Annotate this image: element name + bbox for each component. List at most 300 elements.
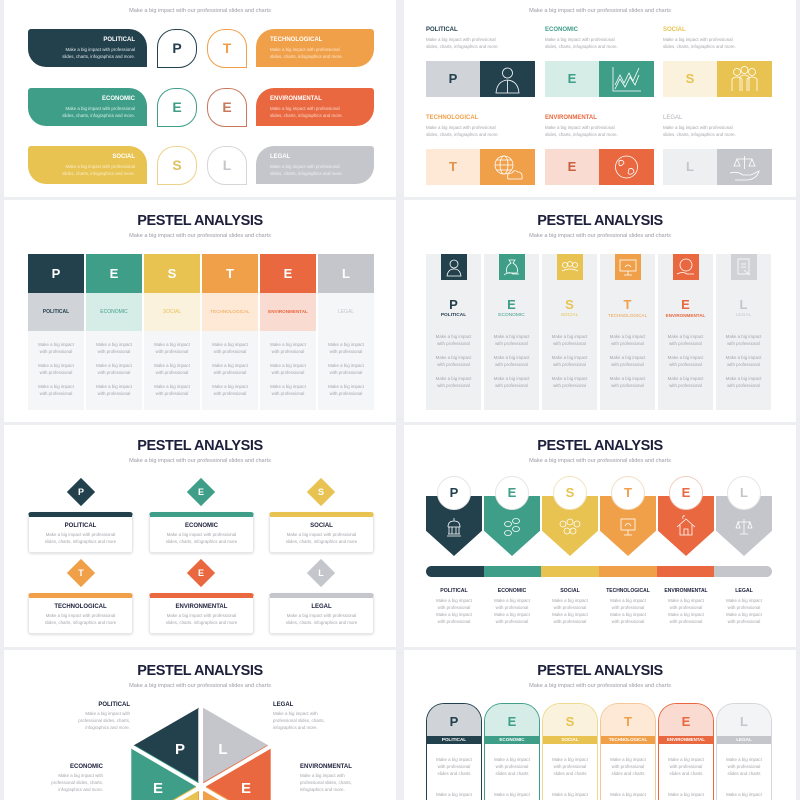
arch: environmental: with professional [670, 764, 702, 769]
bubble: E environmental [207, 88, 247, 127]
arch: environmental: E [682, 714, 690, 729]
card: environmental: Make a big impact with professional [167, 613, 236, 618]
column: legal: L [342, 266, 350, 281]
arch: social: Make a big impact [552, 792, 588, 797]
item: social: SOCIAL [663, 27, 686, 33]
column: political: Make a big impact [436, 376, 471, 381]
label: economic: infographics and more. [58, 787, 103, 792]
labels row: Make a big impact [668, 612, 704, 617]
item: social: Make a big impact with professional [663, 37, 733, 42]
column: social: SOCIAL [163, 309, 181, 315]
card: social: SOCIAL [310, 523, 333, 529]
bubble: E environmental: E [222, 99, 232, 115]
arch: economic: with professional [496, 764, 528, 769]
icon: people [717, 61, 772, 97]
column: environmental: E [681, 297, 690, 312]
column: environmental: ENVIRONMENTAL [268, 309, 308, 314]
card: environmental [149, 593, 254, 634]
column: social: Make a big impact [154, 363, 190, 368]
labels row: POLITICAL [440, 588, 468, 594]
title: PESTEL ANALYSIS [537, 663, 663, 679]
item: economic: slides, charts, infographics and more. [545, 44, 618, 49]
labels row: with professional [612, 605, 644, 610]
label: political: POLITICAL [98, 702, 130, 708]
shield: environmental: E [682, 485, 690, 500]
column: legal: with professional [727, 341, 760, 346]
labels row: Make a big impact [610, 598, 646, 603]
column: technological: with professional [611, 341, 644, 346]
column: social: Make a big impact [154, 342, 190, 347]
arch: economic: Make a big impact [494, 757, 530, 762]
subtitle: Make a big impact with our professional slides and charts [129, 233, 271, 239]
column: political [28, 254, 84, 410]
bubble: P: P [172, 40, 182, 56]
arch: technological: slides and charts [612, 771, 644, 776]
box: political: slides, charts, infographics and more. [62, 54, 135, 59]
box: social: SOCIAL [112, 154, 135, 160]
labels row: ECONOMIC [498, 588, 526, 594]
box: political: POLITICAL [103, 37, 135, 43]
slide 6: shield markers with timeline bar [404, 425, 796, 647]
arch: legal [716, 703, 772, 800]
title: PESTEL ANALYSIS [537, 438, 663, 454]
arch: legal: Make a big impact [726, 792, 762, 797]
arch: environmental: Make a big impact [668, 792, 704, 797]
column: economic [484, 254, 539, 410]
card: economic: ECONOMIC [185, 523, 218, 529]
box: political [28, 29, 147, 67]
bubble: S [157, 146, 197, 185]
item: legal: L [686, 159, 694, 174]
arch: political: P [450, 714, 458, 729]
diamond: T: T [78, 568, 84, 578]
subtitle: Make a big impact with our professional slides and charts [529, 233, 671, 239]
shield: technological [600, 476, 656, 556]
diamond: S: S [318, 487, 324, 497]
label: environmental: ENVIRONMENTAL [300, 764, 352, 770]
column: economic: with professional [98, 370, 130, 375]
column: political: with professional [437, 362, 470, 367]
labels row: Make a big impact [726, 612, 762, 617]
subtitle: Make a big impact with our professional slides and charts [129, 8, 271, 14]
column: legal: Make a big impact [328, 342, 364, 347]
card: social [269, 512, 374, 553]
box: economic [28, 88, 147, 126]
column: legal: LEGAL [736, 313, 751, 318]
labels row: TECHNOLOGICAL [606, 588, 650, 594]
shield: environmental [658, 476, 714, 556]
column: social: SOCIAL [561, 313, 578, 318]
column: economic: ECONOMIC [498, 313, 525, 318]
arch: economic: slides and charts [496, 771, 528, 776]
arch: legal: slides and charts [728, 771, 760, 776]
box: social: slides, charts, infographics and more. [62, 171, 135, 176]
column: environmental: Make a big impact [270, 342, 306, 347]
item: economic: ECONOMIC [545, 27, 578, 33]
subtitle: Make a big impact with our professional slides and charts [129, 683, 271, 689]
box: legal: slides, charts, infographics and more. [270, 171, 343, 176]
box: legal [256, 146, 374, 184]
labels row: Make a big impact [726, 598, 762, 603]
diamond: E2: E [198, 568, 204, 578]
labels row: with professional [496, 605, 528, 610]
column: technological [202, 254, 258, 410]
box: legal: LEGAL [270, 154, 290, 160]
arch: social [542, 703, 598, 800]
column: economic: Make a big impact [494, 355, 529, 360]
column: political: with professional [40, 349, 72, 354]
column: political: with professional [40, 391, 72, 396]
slide 1: speech bubble layout [4, 0, 396, 197]
icon: scales hand [717, 149, 772, 185]
column: economic: with professional [495, 383, 528, 388]
labels row: Make a big impact [436, 612, 472, 617]
icon: earth [599, 149, 654, 185]
item: environmental [545, 114, 654, 185]
card: economic: Make a big impact with professional [167, 532, 236, 537]
card: technological: TECHNOLOGICAL [54, 604, 107, 610]
item: political: P [449, 71, 457, 86]
column: social: Make a big impact [552, 334, 587, 339]
column: political: Make a big impact [436, 334, 471, 339]
title: PESTEL ANALYSIS [137, 663, 263, 679]
labels row: with professional [554, 619, 586, 624]
labels row: LEGAL [735, 588, 753, 594]
column: technological: with professional [611, 362, 644, 367]
arch: environmental: Make a big impact [668, 757, 704, 762]
labels row: with professional [728, 605, 760, 610]
labels row: Make a big impact [552, 612, 588, 617]
diamond: P: P [78, 487, 84, 497]
column: environmental: ENVIRONMENTAL [666, 313, 705, 318]
column: environmental: with professional [669, 383, 702, 388]
card: social: slides, charts, infographics and more [286, 539, 357, 544]
item: technological: TECHNOLOGICAL [426, 115, 478, 121]
title: PESTEL ANALYSIS [137, 438, 263, 454]
column: social [144, 254, 200, 410]
slide 7: hexagon [4, 650, 396, 800]
box: environmental [256, 88, 374, 126]
column: legal: with professional [727, 383, 760, 388]
column: economic [86, 254, 142, 410]
column: social: S [168, 266, 176, 281]
column: technological [600, 254, 655, 410]
arch: legal: LEGAL [736, 737, 752, 742]
card: technological: Make a big impact with professional [46, 613, 115, 618]
column: legal: with professional [330, 391, 362, 396]
diamond: E: E [198, 487, 204, 497]
labels row: with professional [612, 619, 644, 624]
diamond: L [307, 559, 335, 587]
label: environmental: Make a big impact with [300, 773, 345, 778]
column: social: Make a big impact [154, 384, 190, 389]
label: economic: ECONOMIC [70, 764, 103, 770]
item: political [426, 26, 535, 97]
arch: political: Make a big impact [436, 792, 472, 797]
labels row: SOCIAL [560, 588, 580, 594]
diamond: L: L [318, 568, 324, 578]
item: environmental: E [568, 159, 576, 174]
arch: technological: TECHNOLOGICAL [609, 737, 647, 742]
title: PESTEL ANALYSIS [137, 213, 263, 229]
column: environmental: with professional [669, 362, 702, 367]
label: economic [51, 764, 103, 792]
column: economic: E [110, 266, 118, 281]
box: social: Make a big impact with professional [65, 164, 135, 169]
arch: technological: Make a big impact [610, 757, 646, 762]
column: technological: T [226, 266, 234, 281]
column: social: with professional [156, 391, 188, 396]
shield: technological: T [624, 485, 632, 500]
column: social: with professional [553, 383, 586, 388]
bubble: L: L [223, 157, 231, 173]
column: technological: TECHNOLOGICAL [210, 309, 250, 314]
column: legal [716, 254, 771, 410]
column: economic: with professional [98, 349, 130, 354]
box: environmental: Make a big impact with professional [270, 106, 340, 111]
card: legal: LEGAL [311, 604, 332, 610]
hexagon chart [131, 708, 271, 800]
column: technological: Make a big impact [212, 384, 248, 389]
labels row: Make a big impact [436, 598, 472, 603]
column: legal: Make a big impact [726, 376, 761, 381]
slide 2: letter + icon tiles [404, 0, 796, 197]
column: legal: Make a big impact [726, 355, 761, 360]
label: environmental [300, 764, 352, 792]
box: economic: ECONOMIC [102, 96, 135, 102]
bubble: L [207, 146, 247, 185]
box: technological: Make a big impact with professional [270, 47, 340, 52]
arch: social: SOCIAL [561, 737, 579, 742]
item: legal: slides, charts, infographics and more. [663, 132, 736, 137]
column: economic: Make a big impact [96, 384, 132, 389]
item: social: S [686, 71, 694, 86]
column: political: Make a big impact [38, 342, 74, 347]
column: technological: Make a big impact [610, 334, 645, 339]
column: economic: E [507, 297, 516, 312]
item: technological [426, 114, 535, 185]
column: economic: with professional [98, 391, 130, 396]
arch: social: Make a big impact [552, 757, 588, 762]
arch: social: with professional [554, 764, 586, 769]
labels row: ENVIRONMENTAL [664, 588, 708, 594]
label: economic: professional slides, charts, [51, 780, 103, 785]
box: environmental: slides, charts, infographics and more. [270, 113, 343, 118]
shield: economic: E [508, 485, 516, 500]
slide 8: arch cards [404, 650, 796, 800]
column: environmental: with professional [272, 370, 304, 375]
column: environmental: Make a big impact [270, 384, 306, 389]
item: legal: LEGAL [663, 115, 682, 121]
column: environmental: with professional [669, 341, 702, 346]
column: environmental: Make a big impact [668, 355, 703, 360]
arch: economic: ECONOMIC [499, 737, 525, 742]
arch: economic: E [508, 714, 516, 729]
labels row: with professional [438, 605, 470, 610]
column: political: P [449, 297, 458, 312]
arch: technological [600, 703, 656, 800]
box: technological [256, 29, 374, 67]
column: technological: with professional [214, 370, 246, 375]
column: economic: Make a big impact [96, 342, 132, 347]
item: political: POLITICAL [426, 27, 458, 33]
box: technological: TECHNOLOGICAL [270, 37, 322, 43]
card: political: slides, charts, infographics and more [45, 539, 116, 544]
card: technological: slides, charts, infographics and more [45, 620, 116, 625]
diamond: E2 [187, 559, 215, 587]
labels row [436, 588, 762, 624]
column: technological: T [624, 297, 631, 312]
subtitle: Make a big impact with our professional slides and charts [529, 458, 671, 464]
arch: political: slides and charts [438, 771, 470, 776]
hexagon chart: E [241, 780, 251, 797]
labels row: with professional [496, 619, 528, 624]
labels row: with professional [438, 619, 470, 624]
arch: economic [484, 703, 540, 800]
column: technological: Make a big impact [212, 342, 248, 347]
shield: legal [716, 476, 772, 556]
labels row: with professional [670, 619, 702, 624]
column: economic: Make a big impact [96, 363, 132, 368]
label: legal: professional slides, charts, [273, 718, 325, 723]
card: economic [149, 512, 254, 553]
icon: chart [599, 61, 654, 97]
labels row: Make a big impact [610, 612, 646, 617]
label: legal: LEGAL [273, 702, 293, 708]
column: political: POLITICAL [43, 309, 69, 315]
column: economic: with professional [495, 362, 528, 367]
diamond: S [307, 478, 335, 506]
labels row: with professional [554, 605, 586, 610]
column: social [542, 254, 597, 410]
arch: economic: Make a big impact [494, 792, 530, 797]
shield: social: S [566, 485, 574, 500]
diamond: P [67, 478, 95, 506]
item: economic: Make a big impact with professional [545, 37, 615, 42]
box: technological: slides, charts, infographics and more. [270, 54, 343, 59]
column: political: Make a big impact [436, 355, 471, 360]
column: environmental [260, 254, 316, 410]
item: political: Make a big impact with professional [426, 37, 496, 42]
column: environmental: Make a big impact [668, 334, 703, 339]
arch: legal: Make a big impact [726, 757, 762, 762]
card: legal [269, 593, 374, 634]
arch: social: S [566, 714, 574, 729]
diamond: E [187, 478, 215, 506]
label: environmental: infographics and more. [300, 787, 345, 792]
shield: political [426, 476, 482, 556]
column: environmental: E [284, 266, 292, 281]
slide 3: column table with letter headers [4, 200, 396, 422]
title: PESTEL ANALYSIS [537, 213, 663, 229]
shield: legal: L [740, 485, 748, 500]
column: social: with professional [156, 349, 188, 354]
bubble: P [157, 29, 197, 68]
arch: social: slides and charts [554, 771, 586, 776]
bubble: S: S [172, 157, 182, 173]
subtitle: Make a big impact with our professional slides and charts [129, 458, 271, 464]
label: political: professional slides, charts, [78, 718, 130, 723]
box: environmental: ENVIRONMENTAL [270, 96, 322, 102]
column: political [426, 254, 481, 410]
bubble: E [157, 88, 197, 127]
label: economic: Make a big impact with [58, 773, 103, 778]
column: legal: Make a big impact [328, 363, 364, 368]
item: environmental: Make a big impact with professional [545, 125, 615, 130]
arch: environmental: slides and charts [670, 771, 702, 776]
card: political: POLITICAL [65, 523, 96, 529]
arch: environmental: ENVIRONMENTAL [667, 737, 705, 742]
column: social: Make a big impact [552, 355, 587, 360]
item: economic [545, 26, 654, 97]
item: technological: T [449, 159, 457, 174]
labels row: with professional [670, 605, 702, 610]
timeline bar [426, 566, 772, 577]
labels row: Make a big impact [668, 598, 704, 603]
arch: legal: with professional [728, 764, 760, 769]
box: social [28, 146, 147, 184]
labels row: Make a big impact [552, 598, 588, 603]
labels row: Make a big impact [494, 598, 530, 603]
column: environmental: with professional [272, 349, 304, 354]
card: environmental: slides, charts, infographics and more [166, 620, 237, 625]
subtitle: Make a big impact with our professional slides and charts [529, 8, 671, 14]
column: technological: Make a big impact [212, 363, 248, 368]
arch: technological: with professional [612, 764, 644, 769]
shield: political: P [450, 485, 458, 500]
item: political: slides, charts, infographics and more. [426, 44, 499, 49]
column: environmental [658, 254, 713, 410]
column: social: with professional [156, 370, 188, 375]
hexagon chart: E [153, 780, 163, 797]
column: economic: with professional [495, 341, 528, 346]
card: legal: Make a big impact with professional [287, 613, 356, 618]
column: legal: Make a big impact [726, 334, 761, 339]
arch: legal: L [740, 714, 748, 729]
item: environmental: slides, charts, infographics and more. [545, 132, 618, 137]
card: technological [28, 593, 133, 634]
labels row: Make a big impact [494, 612, 530, 617]
arch: political: with professional [438, 764, 470, 769]
slide 5: diamonds and cards [4, 425, 396, 647]
label: environmental: professional slides, charts, [300, 780, 352, 785]
column: social: S [565, 297, 574, 312]
label: legal [273, 702, 325, 730]
shield: economic [484, 476, 540, 556]
column: legal: LEGAL [338, 309, 354, 315]
card: political: Make a big impact with professional [46, 532, 115, 537]
column: political: Make a big impact [38, 363, 74, 368]
column: legal: Make a big impact [328, 384, 364, 389]
diamond: T [67, 559, 95, 587]
label: legal: Make a big impact with [273, 711, 318, 716]
icon: person [480, 61, 535, 97]
column: political: Make a big impact [38, 384, 74, 389]
card: environmental: ENVIRONMENTAL [176, 604, 227, 610]
hexagon chart: L [218, 741, 228, 758]
item: social [663, 26, 772, 97]
arch: technological: Make a big impact [610, 792, 646, 797]
box: political: Make a big impact with professional [65, 47, 135, 52]
bubble: T [207, 29, 247, 68]
column: social: with professional [553, 341, 586, 346]
arch: political [426, 703, 482, 800]
column: environmental: Make a big impact [270, 363, 306, 368]
column: economic: Make a big impact [494, 334, 529, 339]
item: legal: Make a big impact with professional [663, 125, 733, 130]
item: legal [663, 114, 772, 185]
column: political: with professional [437, 383, 470, 388]
